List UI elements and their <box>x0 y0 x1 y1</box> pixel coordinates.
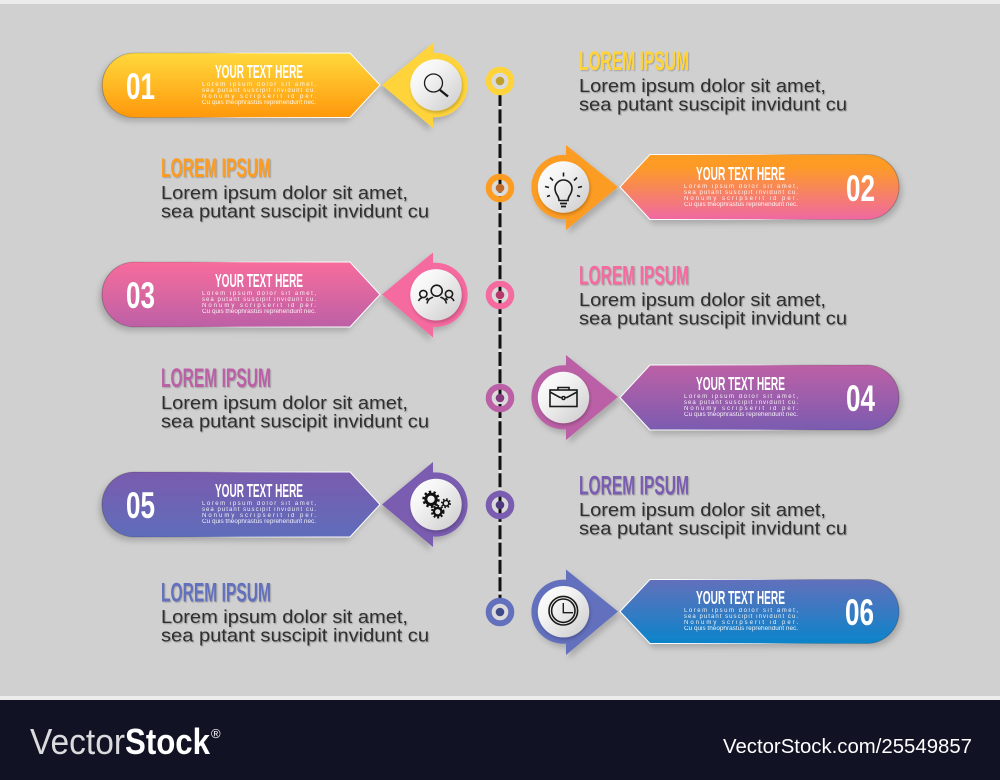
step 04 banner <box>620 365 899 430</box>
step 03 banner: Lorem ipsum dolor sit amet, <box>202 291 316 297</box>
footer image id: VectorStock.com/25549857 <box>723 736 972 758</box>
step 04 banner: Cu quis theophrastus reprehendunt nec. <box>684 412 798 418</box>
timeline dot 2 <box>489 177 511 199</box>
step 02 banner: sea putant suscipit invidunt cu. <box>684 190 798 196</box>
step 05 banner <box>102 472 380 537</box>
footer logo: ® <box>211 726 221 741</box>
icon: magnifier <box>424 74 448 96</box>
step 05 arrow with gears icon <box>382 462 468 547</box>
step 05 banner: Nonumy scripserit id per. <box>202 513 316 519</box>
icon: briefcase <box>550 388 577 406</box>
step 02 text: LOREM IPSUM <box>161 153 271 183</box>
timeline dot 1 <box>489 70 511 92</box>
timeline dashed line <box>498 92 502 598</box>
step 01 banner: sea putant suscipit invidunt cu. <box>202 88 316 94</box>
step 02 text: Lorem ipsum dolor sit amet, <box>161 182 408 203</box>
icon: gears <box>424 492 450 518</box>
footer logo: Vector <box>30 721 125 762</box>
icon: clock <box>549 596 578 625</box>
step 01 text: sea putant suscipit invidunt cu <box>579 94 847 114</box>
step 03 text <box>579 260 847 328</box>
step 06 banner: YOUR TEXT HERE <box>696 588 785 608</box>
step 06 arrow with clock icon <box>531 570 618 655</box>
step 01 text: LOREM IPSUM <box>579 46 689 76</box>
step 04 banner: YOUR TEXT HERE <box>696 374 785 394</box>
step 01 banner: Nonumy scripserit id per. <box>202 94 316 100</box>
step 01 banner: Lorem ipsum dolor sit amet, <box>202 82 316 88</box>
step 01 banner <box>102 53 380 118</box>
step 06 text: sea putant suscipit invidunt cu <box>161 624 429 646</box>
step 02 banner: Lorem ipsum dolor sit amet, <box>684 184 798 190</box>
step 04 banner: Lorem ipsum dolor sit amet, <box>684 394 798 400</box>
step 06 text: LOREM IPSUM <box>161 578 271 608</box>
step 03 text: LOREM IPSUM <box>579 260 689 290</box>
step 01 banner: Cu quis theophrastus reprehendunt nec. <box>202 100 316 106</box>
step 04 banner: sea putant suscipit invidunt cu. <box>684 400 798 406</box>
step 04 banner: Nonumy scripserit id per. <box>684 406 798 412</box>
step 06 banner <box>620 580 899 644</box>
step 03 text: sea putant suscipit invidunt cu <box>579 308 847 328</box>
step 05 banner: 05 <box>126 485 155 526</box>
step 06 text: Lorem ipsum dolor sit amet, <box>161 606 408 627</box>
step 03 banner: sea putant suscipit invidunt cu. <box>202 297 316 303</box>
footer band <box>0 700 1000 780</box>
step 05 text: sea putant suscipit invidunt cu <box>579 518 847 538</box>
step 02 banner: Nonumy scripserit id per. <box>684 196 798 202</box>
timeline dot 4 <box>489 387 511 409</box>
step 02 arrow with bulb icon <box>531 145 618 230</box>
step 02 text: sea putant suscipit invidunt cu <box>161 200 429 222</box>
step 05 banner: sea putant suscipit invidunt cu. <box>202 507 316 513</box>
step 01 arrow with magnifier icon <box>382 43 468 128</box>
step 01 banner: 01 <box>126 66 155 107</box>
step 06 banner: sea putant suscipit invidunt cu. <box>684 614 798 620</box>
step 06 text <box>161 578 429 646</box>
step 04 text <box>161 363 429 432</box>
step 06 banner: Lorem ipsum dolor sit amet, <box>684 608 798 614</box>
step 06 banner: Cu quis theophrastus reprehendunt nec. <box>684 626 798 632</box>
step 04 banner: 04 <box>846 378 875 419</box>
step 03 banner: Cu quis theophrastus reprehendunt nec. <box>202 309 316 315</box>
step 05 banner: YOUR TEXT HERE <box>215 481 303 501</box>
step 02 banner <box>620 154 899 220</box>
step 05 banner: Lorem ipsum dolor sit amet, <box>202 501 316 507</box>
footer logo: Stock <box>125 721 211 762</box>
step 04 arrow with briefcase icon <box>531 355 618 440</box>
icon: people <box>418 285 454 304</box>
step 03 banner: YOUR TEXT HERE <box>215 271 303 291</box>
timeline dot 5 <box>489 494 511 516</box>
step 03 arrow with people icon <box>382 252 468 338</box>
step 03 banner: 03 <box>126 275 155 316</box>
step 01 text <box>579 46 847 114</box>
icon: light bulb <box>545 172 582 206</box>
step 02 banner: YOUR TEXT HERE <box>696 164 785 184</box>
step 06 banner: Nonumy scripserit id per. <box>684 620 798 626</box>
step 05 banner: Cu quis theophrastus reprehendunt nec. <box>202 519 316 525</box>
step 05 text <box>579 470 847 538</box>
step 02 banner: Cu quis theophrastus reprehendunt nec. <box>684 202 798 208</box>
step 03 text: Lorem ipsum dolor sit amet, <box>579 289 826 310</box>
step 02 text <box>161 153 429 222</box>
step 01 banner: YOUR TEXT HERE <box>215 62 303 82</box>
timeline dot 6 <box>489 601 511 623</box>
timeline dot centres <box>491 72 509 621</box>
step 04 text: LOREM IPSUM <box>161 363 271 393</box>
step 06 banner: 06 <box>845 592 874 633</box>
footer logo <box>30 721 221 762</box>
step 03 banner <box>102 262 380 327</box>
step 04 text: Lorem ipsum dolor sit amet, <box>161 392 408 413</box>
step 01 text: Lorem ipsum dolor sit amet, <box>579 75 826 96</box>
step 05 text: LOREM IPSUM <box>579 470 689 500</box>
step 04 text: sea putant suscipit invidunt cu <box>161 410 429 432</box>
step 03 banner: Nonumy scripserit id per. <box>202 303 316 309</box>
timeline dot 3 <box>489 284 511 306</box>
step 05 text: Lorem ipsum dolor sit amet, <box>579 499 826 520</box>
step 02 banner: 02 <box>846 168 875 209</box>
